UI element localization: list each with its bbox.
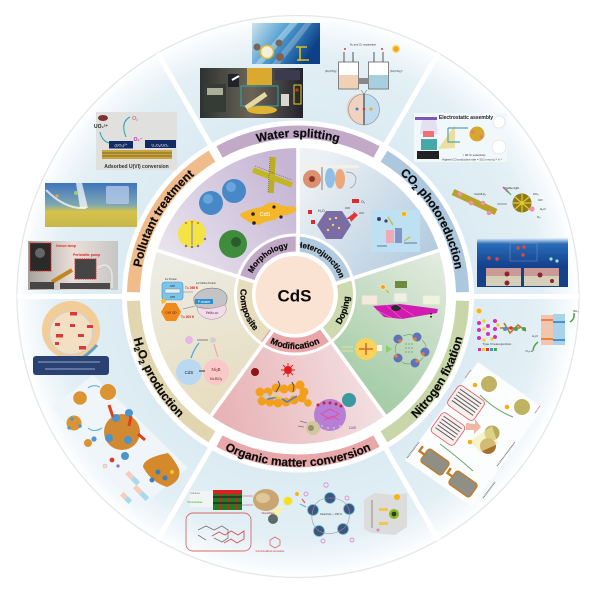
diagram: nanorod and nanoball: Co(OH)₂ — [474, 192, 487, 196]
icon: blue spheres — [199, 179, 246, 215]
figures: modification sector — [251, 363, 356, 435]
diagram: reaction cycle — [295, 483, 354, 543]
panel: adsorbed U(VI) conversion: Adsorbed U(VI) conversion — [104, 164, 169, 170]
diagram: biomass to product: Woodchips — [262, 511, 275, 515]
band: CO2 photoreduction — [380, 150, 469, 292]
image: reactor photo — [200, 68, 303, 118]
hub band: Morphology: Morphology — [248, 244, 288, 274]
diagram: nanorod and nanoball: CO₂ — [533, 192, 540, 196]
panel: adsorbed U(VI) conversion: UO₂²⁺ — [94, 124, 108, 130]
diagram: dual electrolysis cell — [325, 42, 404, 125]
sector: Doping — [298, 250, 446, 416]
diagram: heterojunction scheme: O₂+H⁺ — [526, 349, 535, 353]
hub band: Composite: Composite — [240, 289, 258, 330]
band: CO2 photoreduction: CO — [402, 169, 417, 184]
diagram: nitrogenase composite: 1/2 MoFe Protein — [196, 281, 216, 285]
hub band: Doping — [323, 276, 353, 340]
band: Nitrogen fixation: Nitrogen fixation — [410, 337, 463, 418]
band: Pollutant treatment: Pollutant treatment — [133, 170, 194, 267]
panel: electrostatic assembly: Electrostatic assembly — [439, 115, 493, 121]
diagram: nitrogenase composite: FeMo-co — [206, 311, 219, 315]
panel: electrostatic assembly — [414, 113, 507, 162]
panel: adsorbed U(VI) conversion: O₂⁻ — [134, 137, 143, 143]
diagram: dual electrolysis cell: [Fe(CN)₆]⁴⁻ — [325, 69, 339, 73]
diagram: hexagon catalyst: H₂O — [318, 209, 325, 213]
sector: Modification — [211, 296, 385, 444]
image: lamp and pump photo: Xenon lamp — [56, 244, 76, 248]
image: water droplet particle — [33, 301, 109, 375]
diagram: nitrogenase composite: CdS QD — [165, 310, 177, 314]
icon: purple sphere: CdS — [349, 426, 356, 430]
panel: electrostatic assembly: > 90 % selectivity — [462, 153, 486, 157]
hub band: Composite — [237, 278, 270, 342]
band: CO2 photoreduction: photoreduction — [416, 188, 462, 269]
diagram: reaction cycle: Selectivity ~ 100 % — [320, 512, 343, 516]
icon: yellow doped particle — [341, 338, 392, 360]
diagram: dual electrolysis cell: [Fe(CN)₆]³⁻ — [390, 69, 404, 73]
band: CO2 photoreduction: 2 — [411, 184, 418, 191]
image: solar nanoparticles — [252, 23, 320, 64]
diagram: nanorod and nanoball: CO — [538, 198, 543, 202]
diagram: CdS and Ni2B charge transfer: Ni-BOₓ — [210, 376, 223, 381]
diagram: dual electrolysis cell: H₂ and O₂ separation — [350, 42, 377, 46]
panel: energy scheme — [364, 493, 407, 535]
diagram: CdS and Ni2B charge transfer — [176, 336, 229, 385]
diagram: heterojunction scheme: Type II heterojunction — [483, 342, 512, 346]
diagram: heterojunction scheme — [476, 308, 579, 353]
red rounded boxes — [430, 384, 486, 447]
diagram: CdS and Ni2B charge transfer: Ni₃B — [211, 367, 221, 372]
band: Water splitting: Water splitting — [255, 128, 340, 144]
band: Water splitting — [216, 126, 380, 158]
band: H2O2 production: production — [142, 365, 182, 418]
image: lamp and pump photo — [28, 241, 118, 290]
centre: CdS: CdS — [278, 286, 312, 306]
diagram: heterojunction scheme: H₂O — [532, 334, 538, 338]
panel: rotated nanoparticle card — [52, 375, 188, 510]
figures: doping sector — [341, 281, 440, 368]
diagram: molecular ring — [394, 332, 430, 368]
diagram: biomass to product: Functionalized aromatics — [256, 549, 285, 553]
image: blue CO2 panel — [477, 238, 568, 287]
diagram: nitrogenase composite — [161, 277, 227, 321]
diagram: doped lattice — [362, 281, 440, 319]
hub white disc — [234, 234, 356, 356]
diagram: nitrogenase composite: ATP — [170, 295, 175, 299]
sector: Heterojunction — [298, 148, 439, 296]
diagram: nitrogenase composite: Fe Protein — [165, 277, 178, 281]
image: adsorption scene — [45, 183, 137, 227]
diagram: nanorod and nanoball: Visible light — [504, 186, 519, 190]
diagram: heterojunction scheme: NH₃ — [573, 309, 579, 313]
diagram: hexagon catalyst: O₂ — [361, 200, 366, 204]
icon: CdS sheet: CdS — [260, 212, 271, 218]
panel: electrostatic assembly: Highest CO production rate = 30.2 mmol g⁻¹ h⁻¹ — [442, 158, 502, 162]
tanks — [407, 370, 540, 498]
diagram: band alignment — [302, 165, 359, 190]
panel: adsorbed U(VI) conversion — [94, 112, 177, 170]
diagram: CdS and Ni2B charge transfer: CdS — [185, 370, 193, 375]
band: H2O2 production: 2 — [134, 346, 140, 352]
diagram: hexagon catalyst — [308, 199, 366, 239]
panel: adsorbed U(VI) conversion: O₂ — [132, 116, 138, 122]
figures: CO2 photoreduction — [414, 113, 568, 287]
image: lamp and pump photo: Peristaltic pump — [73, 253, 100, 257]
diagram: nanorod and nanoball: H₂O — [540, 207, 546, 211]
spheres — [440, 376, 530, 471]
hub band: Doping: Doping — [335, 296, 352, 325]
band: H2O2 production: H — [134, 337, 144, 346]
diagram: nanorod and nanoball — [453, 186, 546, 219]
figures: H2O2 production — [33, 301, 188, 510]
diagram: nitrogenase composite: P cluster — [198, 300, 211, 304]
hub band: Morphology — [240, 236, 295, 280]
diagram: nitrogenase composite: T= 203 K — [181, 315, 195, 319]
icon: yellow sphere — [178, 220, 206, 248]
diagram: biomass to product: Cellulose — [190, 492, 201, 495]
icon: crossed nanorods — [253, 157, 292, 193]
panel: charge transfer — [371, 210, 420, 252]
panel: rotated nanoreactor card — [405, 362, 543, 507]
figures: organic matter conversion — [186, 483, 407, 553]
figures: heterojunction sector — [302, 165, 420, 252]
sector: Composite — [150, 250, 298, 416]
figures: water splitting — [200, 23, 404, 125]
diagram: biomass to product — [186, 489, 292, 553]
band: Organic matter conversion: Organic matter conversion — [226, 444, 371, 467]
figures: composite sector — [161, 277, 229, 385]
diagram: nanorod and nanoball: O₂ — [537, 215, 541, 219]
diagram: biomass to product: Hemicellulose — [188, 501, 203, 504]
sector: Morphology — [157, 148, 298, 296]
band: Pollutant treatment — [127, 150, 216, 292]
hub band: Modification — [261, 330, 329, 352]
figures: pollutant treatment — [28, 112, 177, 290]
figures: nitrogen fixation — [405, 308, 579, 507]
band: H2O2 production: 2 — [138, 360, 145, 365]
panel: adsorbed U(VI) conversion: (UO₂)²⁺ — [115, 144, 127, 148]
icon: green sphere — [219, 230, 247, 258]
band: H2O2 production: O — [138, 350, 148, 359]
diagram: nitrogenase composite: T= 298 K — [185, 286, 199, 290]
diagram: catalyst surface — [251, 363, 312, 408]
hub band: Modification: Modification — [270, 338, 320, 350]
band: H2O2 production — [127, 300, 216, 442]
hub band: Heterojunction: Heterojunction — [300, 242, 344, 278]
band: Nitrogen fixation — [380, 300, 469, 442]
panel: adsorbed U(VI) conversion: U₃O₈/UO₂ — [151, 144, 169, 148]
figures: morphology sector — [178, 157, 297, 258]
diagram: nitrogenase composite: ATP — [170, 284, 175, 288]
centre: CdS — [252, 252, 338, 337]
